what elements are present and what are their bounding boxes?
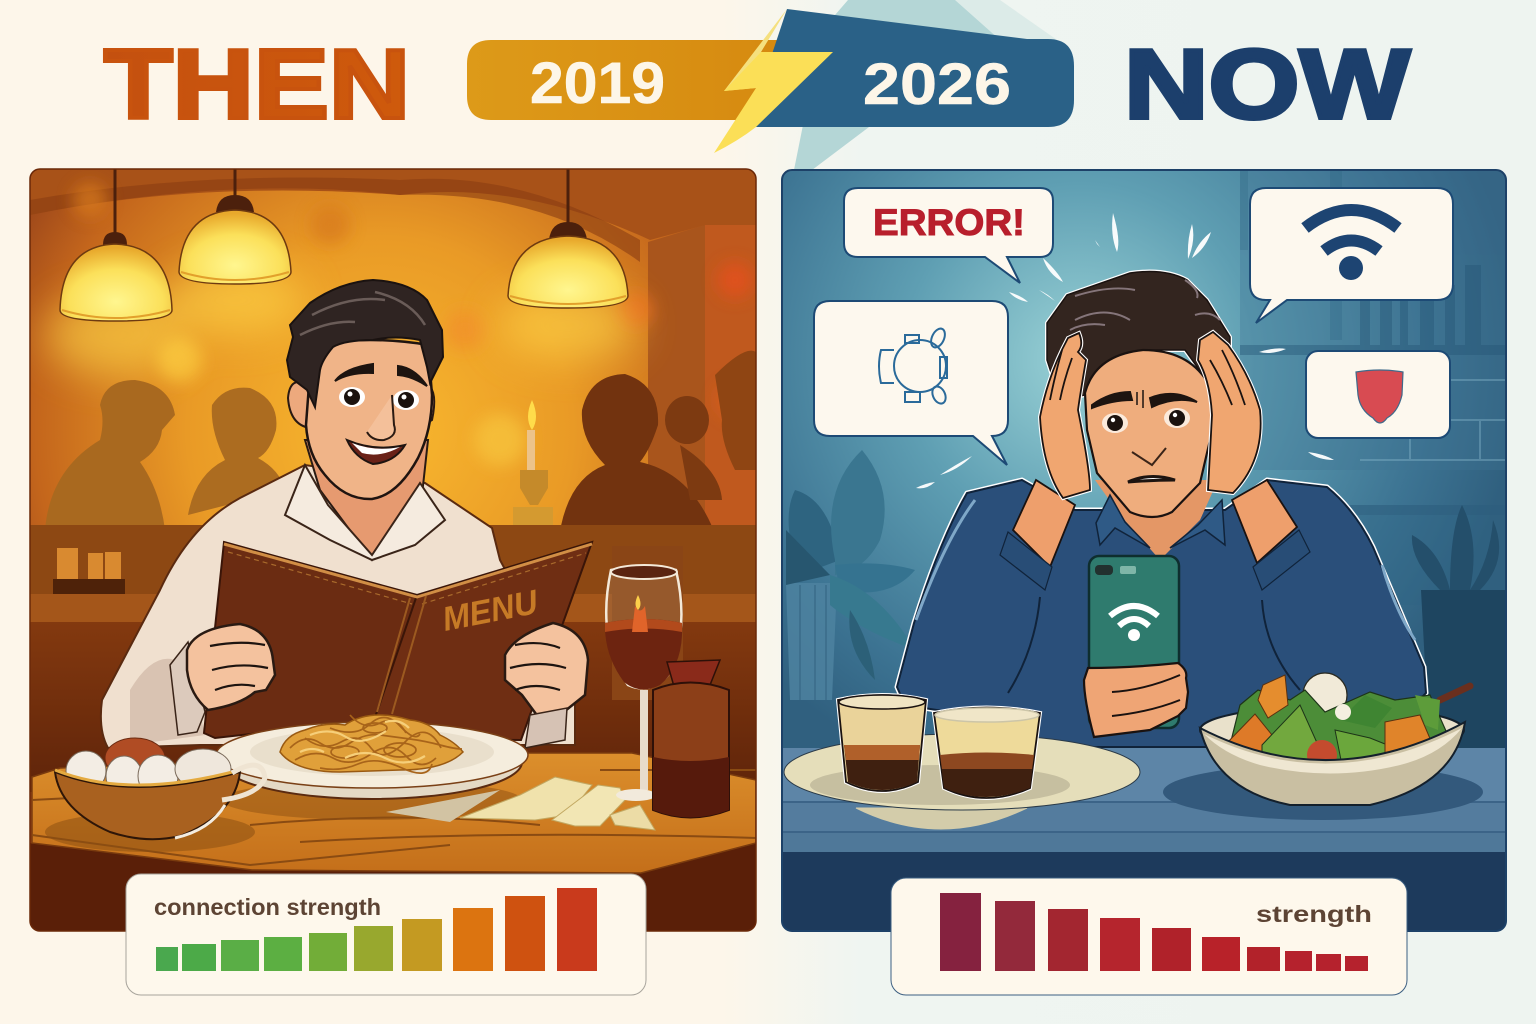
lower panel floor (30, 843, 756, 931)
ears (288, 382, 310, 428)
decorative teal shard behind the date ribbon (794, 0, 1060, 170)
collar (285, 465, 445, 560)
pasta plate (216, 715, 528, 799)
bowl of dumplings (55, 738, 265, 839)
glass right (934, 708, 1040, 798)
ribbon: 2026 (756, 9, 1074, 127)
bowl front (1200, 722, 1465, 805)
title: NOW: NOW (1124, 29, 1411, 139)
sweater cuffs (1000, 530, 1310, 590)
eyebrows (1092, 392, 1197, 408)
nose (1132, 448, 1166, 465)
hand on phone (1084, 663, 1188, 737)
open leather menu (204, 542, 592, 740)
pasta (280, 715, 463, 773)
hand right on menu (505, 623, 588, 748)
mouth (347, 440, 405, 464)
signal card: then (126, 874, 646, 995)
glass left (838, 695, 926, 791)
speech bubble: cup (1306, 351, 1450, 438)
face (306, 340, 432, 499)
hand left on head (1040, 333, 1090, 498)
lamp right (508, 169, 628, 308)
salad (1225, 673, 1470, 780)
neck (305, 440, 428, 560)
eyes (1102, 413, 1128, 433)
title: THEN: THEN (104, 29, 410, 139)
stressed man (897, 272, 1426, 747)
salad bowl (1163, 673, 1483, 820)
bar chart falling (940, 893, 1368, 971)
candle holder (513, 400, 553, 525)
panel: then restaurant scene (30, 169, 756, 931)
icon: round table with chairs (879, 326, 948, 406)
ceiling (30, 170, 756, 240)
hair (287, 280, 443, 407)
speech bubble: table icon (814, 301, 1008, 465)
burst marks (916, 213, 1334, 516)
bokeh lights (72, 182, 753, 466)
shirt (101, 465, 575, 748)
year 2026: 2026 (863, 52, 1011, 117)
sweater (897, 480, 1426, 747)
lamp left (60, 169, 172, 321)
hand right on head (1198, 332, 1261, 493)
menu label: MENU (439, 583, 542, 639)
signal card: now (891, 878, 1407, 995)
lamp middle (179, 169, 291, 284)
ribbon: 2019 (467, 40, 780, 120)
counter items (53, 548, 125, 594)
phone wifi icon (1110, 606, 1158, 641)
speech bubble: error (844, 188, 1053, 283)
pillar and back wall (648, 225, 705, 530)
plate with glasses (784, 734, 1140, 829)
neck and collar (1095, 480, 1218, 560)
panel border then (30, 169, 756, 931)
smiling man (101, 280, 575, 748)
folded napkin (386, 777, 655, 830)
wine glass (605, 565, 682, 801)
panel: now stressed scene (782, 170, 1506, 932)
bottle (653, 660, 729, 818)
bar chart rising (156, 888, 597, 971)
left sleeve cuff (170, 642, 205, 735)
face (1085, 350, 1213, 517)
hair (1047, 272, 1230, 400)
nose (367, 395, 395, 440)
table blue (782, 748, 1506, 932)
timeline ribbon (467, 9, 1074, 153)
year 2019: 2019 (530, 51, 665, 116)
wooden table (32, 753, 756, 873)
speech bubble: wifi (1250, 188, 1453, 323)
right potted plant (1412, 505, 1506, 760)
eyebrows (335, 364, 427, 386)
table shadows (45, 816, 255, 852)
lamp glow (45, 265, 638, 375)
icon: wifi (1305, 210, 1398, 280)
phone with wifi (1089, 556, 1179, 728)
icon: red cup (1356, 370, 1403, 423)
bookshelf (1240, 171, 1505, 520)
error text: ERROR! (873, 202, 1025, 243)
worried mouth (1128, 476, 1175, 482)
forearms (1013, 480, 1075, 567)
hand left on menu (187, 624, 275, 710)
left potted plant (786, 450, 915, 700)
card label: strength (1256, 901, 1372, 927)
eyes (339, 387, 365, 407)
card label: connection strength (154, 894, 381, 920)
back counter (30, 525, 756, 595)
icon: lightning bolt (714, 9, 833, 153)
panel border now (782, 170, 1506, 931)
silhouettes of diners (46, 350, 756, 525)
